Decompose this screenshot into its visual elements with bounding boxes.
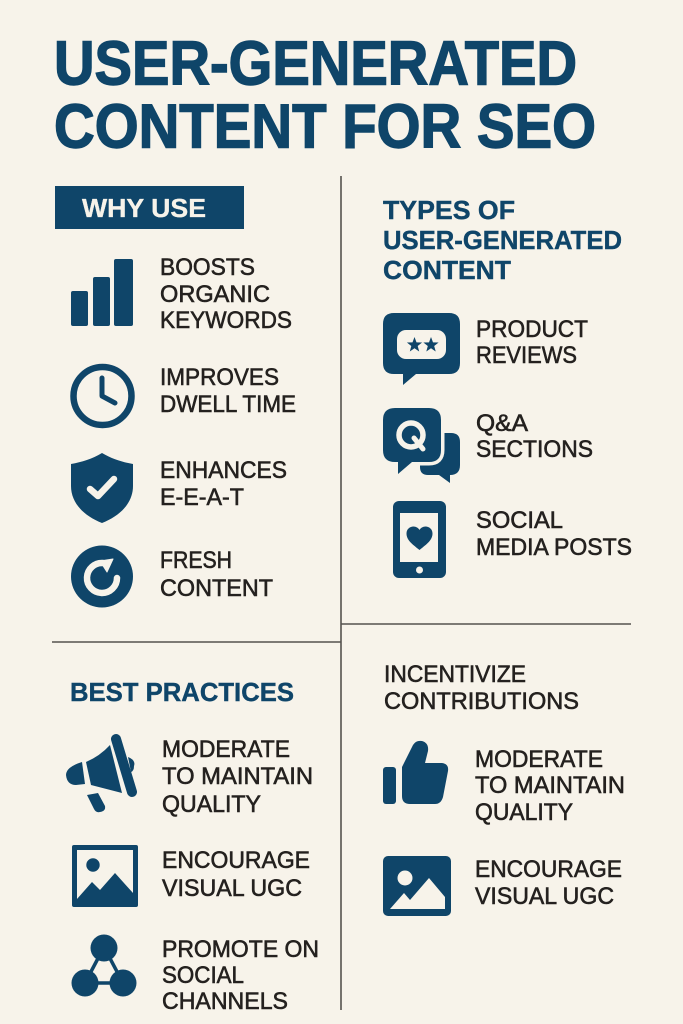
text: improves dwell time: DWELL TIME: [160, 391, 296, 418]
text: improves dwell time: IMPROVES: [160, 364, 279, 391]
text: moderate to maintain quality: MODERATE: [162, 736, 290, 763]
text: q&a sections: SECTIONS: [476, 436, 593, 463]
text: encourage visual ugc: VISUAL UGC: [475, 883, 614, 910]
text: product reviews: PRODUCT: [476, 316, 588, 343]
icon: clock: [74, 367, 132, 425]
text: boosts organic keywords: ORGANIC: [160, 281, 270, 308]
icon: refresh: [71, 546, 133, 608]
text: fresh content: FRESH: [160, 547, 232, 574]
text: enhances e-e-a-t: ENHANCES: [160, 457, 287, 484]
icon: bar chart: [71, 259, 133, 326]
text: improves dwell time: [160, 364, 296, 418]
text: moderate to maintain quality: QUALITY: [162, 791, 261, 818]
icon: thumbs up: [383, 741, 448, 804]
text: moderate to maintain quality: [475, 746, 625, 826]
text: moderate to maintain quality: QUALITY: [475, 799, 573, 826]
icon: megaphone: [66, 739, 134, 812]
text: promote on social channels: SOCIAL: [162, 962, 244, 989]
heading: best practices: BEST PRACTICES: [70, 677, 294, 707]
text: boosts organic keywords: BOOSTS: [160, 254, 255, 281]
text: enhances e-e-a-t: [160, 457, 287, 511]
text: moderate to maintain quality: TO MAINTAIN: [475, 772, 625, 799]
text: product reviews: REVIEWS: [476, 342, 577, 369]
text: encourage visual ugc: [162, 847, 310, 902]
icon: Q&A bubbles: [383, 408, 460, 483]
text: moderate to maintain quality: TO MAINTAIN: [162, 763, 313, 790]
title: USER-GENERATED: [54, 30, 577, 98]
heading: incentivize contributions: INCENTIVIZE: [384, 661, 526, 688]
text: enhances e-e-a-t: E-E-A-T: [160, 484, 244, 511]
text: promote on social channels: PROMOTE ON: [162, 936, 319, 963]
text: encourage visual ugc: ENCOURAGE: [475, 856, 622, 883]
title: [54, 30, 596, 162]
heading: incentivize contributions: CONTRIBUTIONS: [384, 688, 579, 715]
heading: why use: [55, 186, 244, 229]
text: encourage visual ugc: ENCOURAGE: [162, 847, 310, 874]
icon: image frame: [72, 845, 138, 907]
text: product reviews: [476, 316, 588, 369]
text: encourage visual ugc: [475, 856, 622, 910]
text: boosts organic keywords: [160, 254, 292, 334]
heading: why use: WHY USE: [82, 193, 206, 223]
panel: why use: [55, 186, 296, 608]
text: fresh content: [160, 547, 273, 602]
text: q&a sections: [476, 410, 593, 463]
text: q&a sections: Q&A: [476, 410, 529, 437]
text: moderate to maintain quality: MODERATE: [475, 746, 603, 773]
text: fresh content: CONTENT: [160, 575, 273, 602]
text: social media posts: [476, 507, 632, 561]
text: moderate to maintain quality: [162, 736, 313, 818]
panel: types of user-generated content: [383, 195, 632, 578]
icon: network nodes: [72, 934, 136, 996]
text: encourage visual ugc: VISUAL UGC: [162, 875, 302, 902]
text: promote on social channels: [162, 936, 319, 1015]
text: social media posts: MEDIA POSTS: [476, 534, 632, 561]
panel: best practices: [66, 677, 319, 1015]
icon: phone with heart: [393, 501, 446, 578]
title: CONTENT FOR SEO: [54, 92, 596, 162]
icon: review bubble: [383, 313, 460, 385]
heading: types: [383, 195, 622, 285]
text: promote on social channels: CHANNELS: [162, 988, 288, 1015]
icon: image filled: [383, 856, 451, 916]
text: boosts organic keywords: KEYWORDS: [160, 307, 292, 334]
heading: types: TYPES OF: [383, 195, 515, 225]
panel: incentivize contributions: [383, 661, 625, 916]
text: social media posts: SOCIAL: [476, 507, 563, 534]
heading: types: CONTENT: [383, 255, 511, 285]
heading: types: USER-GENERATED: [383, 225, 622, 255]
heading: incentivize contributions: [384, 661, 579, 715]
icon: shield check: [71, 453, 133, 523]
